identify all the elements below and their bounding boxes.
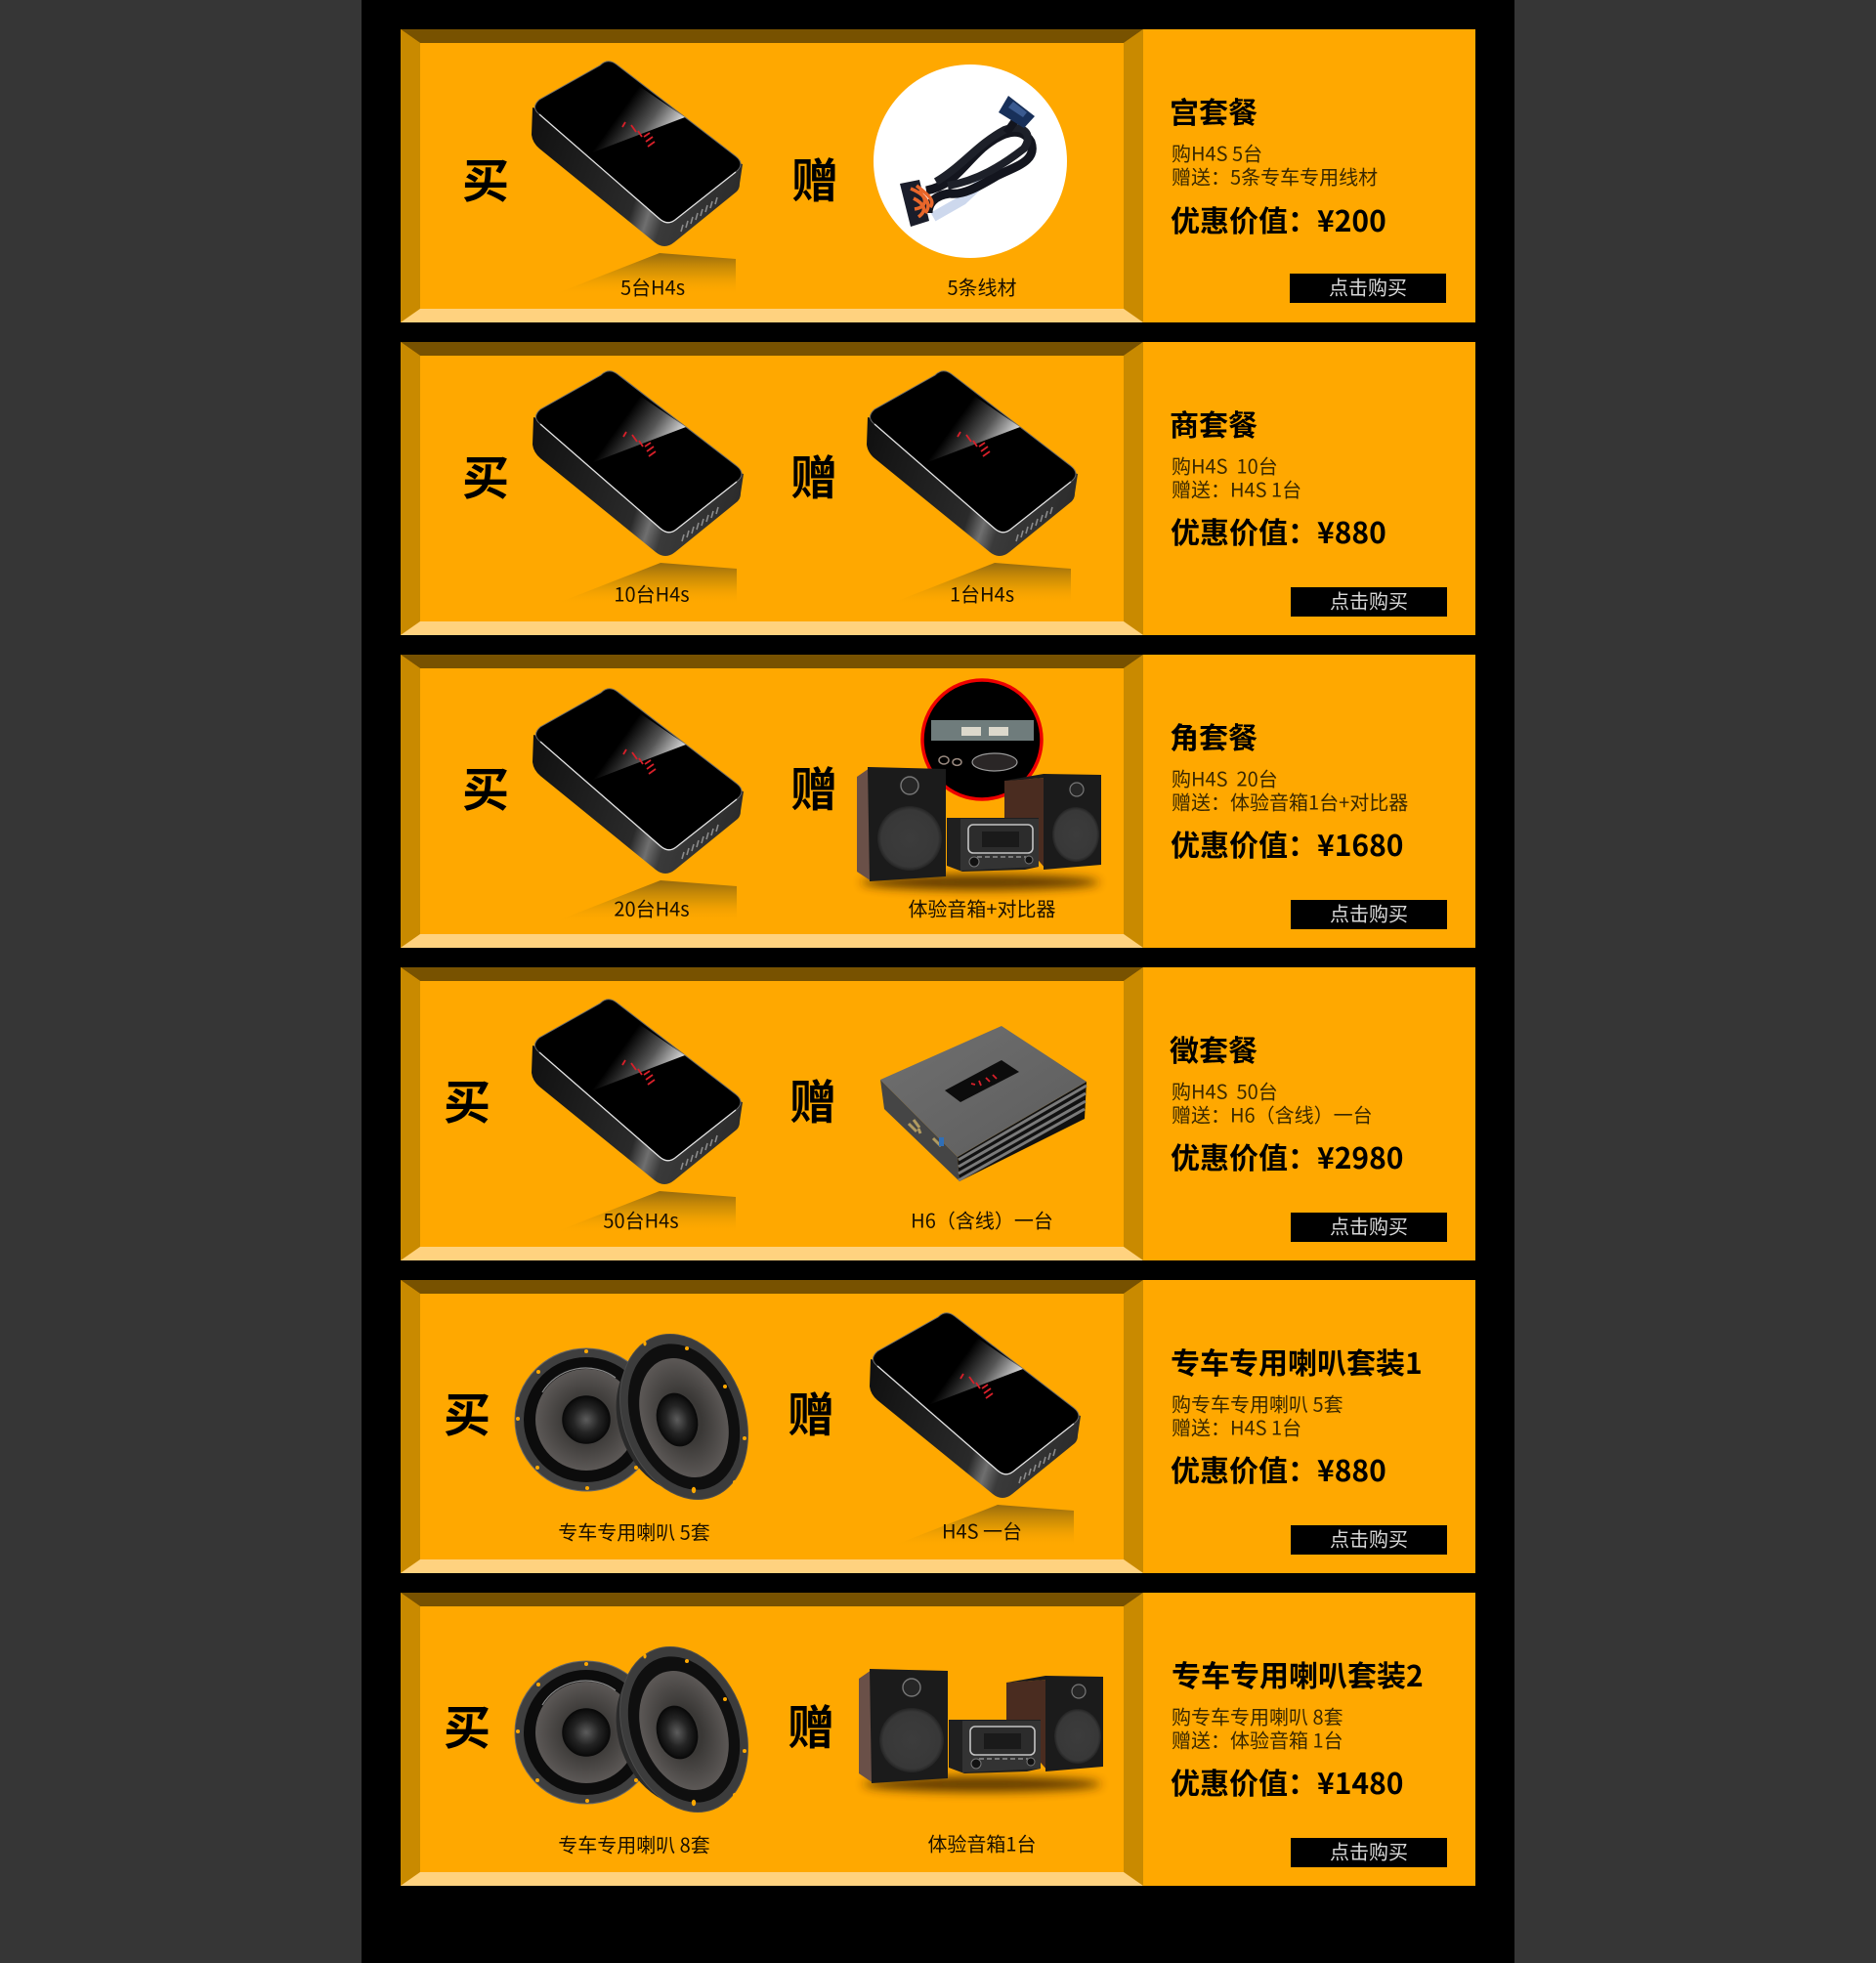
buy label: 买 xyxy=(444,1064,490,1132)
gift: H4S amplifier xyxy=(870,1313,1081,1549)
buy label: 买 xyxy=(462,440,509,508)
package description: 购H4S 10台 xyxy=(1172,451,1278,479)
panel: 专车专用喇叭套装1 xyxy=(401,1280,1475,1573)
package description: 购专车专用喇叭 8套 xyxy=(1172,1702,1343,1729)
caption: 50台H4s: 50台H4s xyxy=(603,1206,679,1233)
gift: stereo system xyxy=(857,767,1101,890)
package title: 宫套餐 xyxy=(1170,89,1258,132)
product: H4S amplifier xyxy=(532,1000,743,1235)
button: 点击购买 xyxy=(1330,899,1408,926)
package description: 赠送：H4S 1台 xyxy=(1172,475,1301,502)
package description: 购专车专用喇叭 5套 xyxy=(1172,1389,1343,1417)
panel: 商套餐 xyxy=(401,342,1475,635)
button: 点击购买 xyxy=(1330,1524,1408,1552)
package description xyxy=(1172,139,1378,190)
package description: 购H4S 20台 xyxy=(1172,764,1278,791)
package title: 专车专用喇叭套装2 xyxy=(1172,1652,1424,1695)
gift: comparator in red circle xyxy=(922,680,1042,799)
price: 优惠价值：¥1480 xyxy=(1171,1760,1403,1803)
buy label: 买 xyxy=(462,751,509,820)
panel: 宫套餐 xyxy=(401,29,1475,322)
button: 点击购买 xyxy=(1329,272,1407,301)
caption: 5条线材: 5条线材 xyxy=(947,272,1017,301)
caption: 10台H4s: 10台H4s xyxy=(614,578,690,608)
panel: 专车专用喇叭套装2 xyxy=(401,1593,1475,1886)
gift: H6 amplifier xyxy=(880,1026,1087,1181)
button xyxy=(1291,1524,1447,1555)
gift label: 赠 xyxy=(788,1377,834,1445)
gift: stereo system xyxy=(859,1669,1103,1792)
package description: 赠送：5条专车专用线材 xyxy=(1172,162,1378,190)
package description xyxy=(1172,451,1301,502)
caption: 体验音箱+对比器: 体验音箱+对比器 xyxy=(908,893,1056,922)
buy label: 买 xyxy=(462,143,509,211)
package description xyxy=(1172,1702,1343,1753)
caption: 体验音箱1台: 体验音箱1台 xyxy=(927,1829,1037,1856)
package title: 专车专用喇叭套装1 xyxy=(1171,1340,1423,1383)
gift label: 赠 xyxy=(790,751,837,820)
package description: 购H4S 5台 xyxy=(1172,139,1262,166)
product: speakers xyxy=(515,1316,770,1517)
gift label: 赠 xyxy=(790,440,837,508)
button xyxy=(1291,1837,1447,1867)
button: 点击购买 xyxy=(1330,1837,1408,1864)
gift label: 赠 xyxy=(789,1064,836,1132)
package description xyxy=(1172,1077,1373,1128)
package description: 赠送：H6（含线）一台 xyxy=(1172,1100,1373,1128)
price: 优惠价值：¥1680 xyxy=(1171,822,1403,865)
package title: 徵套餐 xyxy=(1170,1027,1258,1070)
price: 优惠价值：¥200 xyxy=(1171,197,1386,240)
product: H4S amplifier xyxy=(533,689,744,924)
product: H4S amplifier xyxy=(533,371,744,607)
button xyxy=(1291,586,1447,617)
caption: 5台H4s: 5台H4s xyxy=(620,272,685,301)
caption: H4S 一台: H4S 一台 xyxy=(942,1516,1022,1544)
caption: 专车专用喇叭 5套: 专车专用喇叭 5套 xyxy=(558,1516,710,1546)
package description xyxy=(1172,764,1408,815)
caption: 1台H4s: 1台H4s xyxy=(950,578,1014,608)
caption: 专车专用喇叭 8套: 专车专用喇叭 8套 xyxy=(558,1829,710,1858)
package description: 赠送：H4S 1台 xyxy=(1172,1413,1301,1440)
price: 优惠价值：¥880 xyxy=(1171,1447,1386,1490)
package description xyxy=(1172,1389,1343,1440)
button xyxy=(1291,899,1447,929)
package title: 商套餐 xyxy=(1170,402,1258,445)
package description: 赠送：体验音箱1台+对比器 xyxy=(1172,788,1408,815)
price: 优惠价值：¥2980 xyxy=(1171,1134,1403,1177)
gift label: 赠 xyxy=(788,1689,834,1758)
package description: 赠送：体验音箱 1台 xyxy=(1172,1726,1343,1753)
button xyxy=(1291,1212,1447,1242)
panel: 角套餐 xyxy=(401,655,1475,948)
panel: 徵套餐 xyxy=(401,967,1475,1260)
product: wiring harness in white circle xyxy=(874,64,1067,258)
buy label: 买 xyxy=(444,1689,490,1758)
price: 优惠价值：¥880 xyxy=(1171,509,1386,552)
button: 点击购买 xyxy=(1330,1212,1408,1239)
caption: 20台H4s: 20台H4s xyxy=(614,893,690,922)
buy label: 买 xyxy=(444,1377,490,1445)
caption: H6(含线)一台: H6（含线）一台 xyxy=(911,1206,1053,1233)
product: speakers xyxy=(515,1629,770,1830)
button: 点击购买 xyxy=(1330,586,1408,614)
button xyxy=(1290,272,1446,303)
package title: 角套餐 xyxy=(1170,714,1258,757)
gift: H4S amplifier xyxy=(867,371,1078,607)
central black column xyxy=(362,0,1514,1963)
product: H4S amplifier xyxy=(532,62,743,297)
package description: 购H4S 50台 xyxy=(1172,1077,1278,1104)
gift label: 赠 xyxy=(791,143,838,211)
